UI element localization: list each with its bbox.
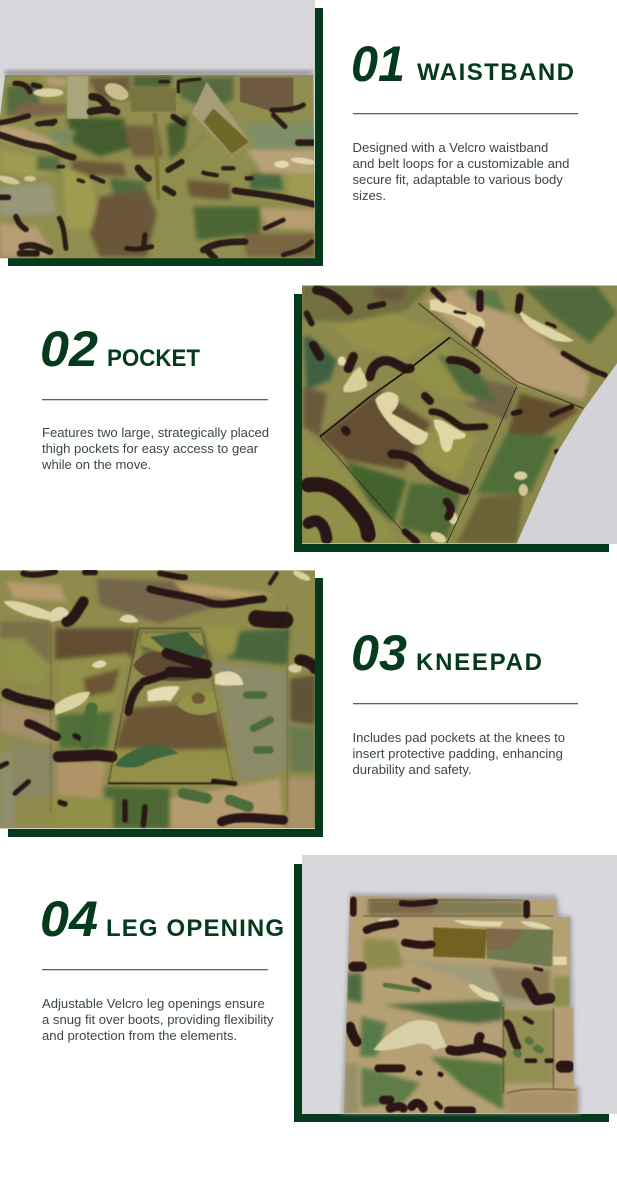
frame: kneepad bbox=[8, 578, 323, 837]
photo background bbox=[0, 0, 315, 258]
panel: leg opening photo bbox=[294, 855, 617, 1122]
waistband fabric bbox=[0, 67, 317, 260]
heading: 01 waistband bbox=[351, 36, 574, 92]
text: leg opening description: Adjustable Velcro leg openings ensure bbox=[42, 996, 265, 1011]
text: pocket description: Features two large, strategically placed bbox=[42, 425, 269, 440]
text: kneepad description: Includes pad pockets at the knees to bbox=[352, 730, 565, 745]
divider 4 bbox=[42, 969, 268, 970]
frame: leg opening bbox=[294, 864, 609, 1122]
heading: 04 leg opening bbox=[40, 891, 284, 947]
frame: pocket bbox=[294, 294, 609, 552]
frame: waistband bbox=[8, 8, 323, 266]
text: pocket description: thigh pockets for easy access to gear bbox=[42, 441, 259, 456]
heading: 01 waistband: 01 bbox=[351, 36, 405, 92]
text: waistband description: secure fit, adaptable to various body bbox=[352, 172, 563, 187]
panel: pocket photo bbox=[290, 280, 617, 552]
heading: 02 pocket: POCKET bbox=[107, 345, 200, 372]
heading: 04 leg opening: 04 bbox=[40, 891, 98, 947]
divider 2 bbox=[42, 399, 268, 400]
heading: 02 pocket bbox=[40, 321, 200, 377]
divider 3 bbox=[353, 703, 578, 704]
heading: 04 leg opening: LEG OPENING bbox=[106, 915, 284, 942]
heading: 01 waistband: WAISTBAND bbox=[417, 59, 574, 86]
heading: 03 kneepad bbox=[351, 625, 542, 681]
leg opening fabric bbox=[340, 893, 580, 1117]
photo background bbox=[302, 855, 617, 1114]
panel: waistband photo bbox=[0, 0, 323, 266]
text: leg opening description: and protection from the elements. bbox=[42, 1028, 237, 1043]
text: leg opening description: a snug fit over boots, providing flexibility bbox=[42, 1012, 274, 1027]
text: waistband description: Designed with a Velcro waistband bbox=[352, 140, 548, 155]
photo background bbox=[302, 286, 617, 544]
heading: 02 pocket: 02 bbox=[40, 321, 98, 377]
panel: kneepad photo bbox=[0, 565, 323, 837]
text: kneepad description: insert protective padding, enhancing bbox=[352, 746, 563, 761]
text: pocket description: while on the move. bbox=[41, 457, 151, 472]
heading: 03 kneepad: KNEEPAD bbox=[416, 649, 542, 676]
text: waistband description: and belt loops for a customizable and bbox=[352, 156, 569, 171]
text: kneepad description: durability and safety. bbox=[352, 762, 472, 777]
kneepad fabric bbox=[0, 565, 317, 832]
heading: 03 kneepad: 03 bbox=[351, 625, 407, 681]
text: waistband description: sizes. bbox=[352, 188, 386, 203]
pocket fabric bbox=[290, 280, 617, 547]
divider 1 bbox=[353, 113, 578, 114]
